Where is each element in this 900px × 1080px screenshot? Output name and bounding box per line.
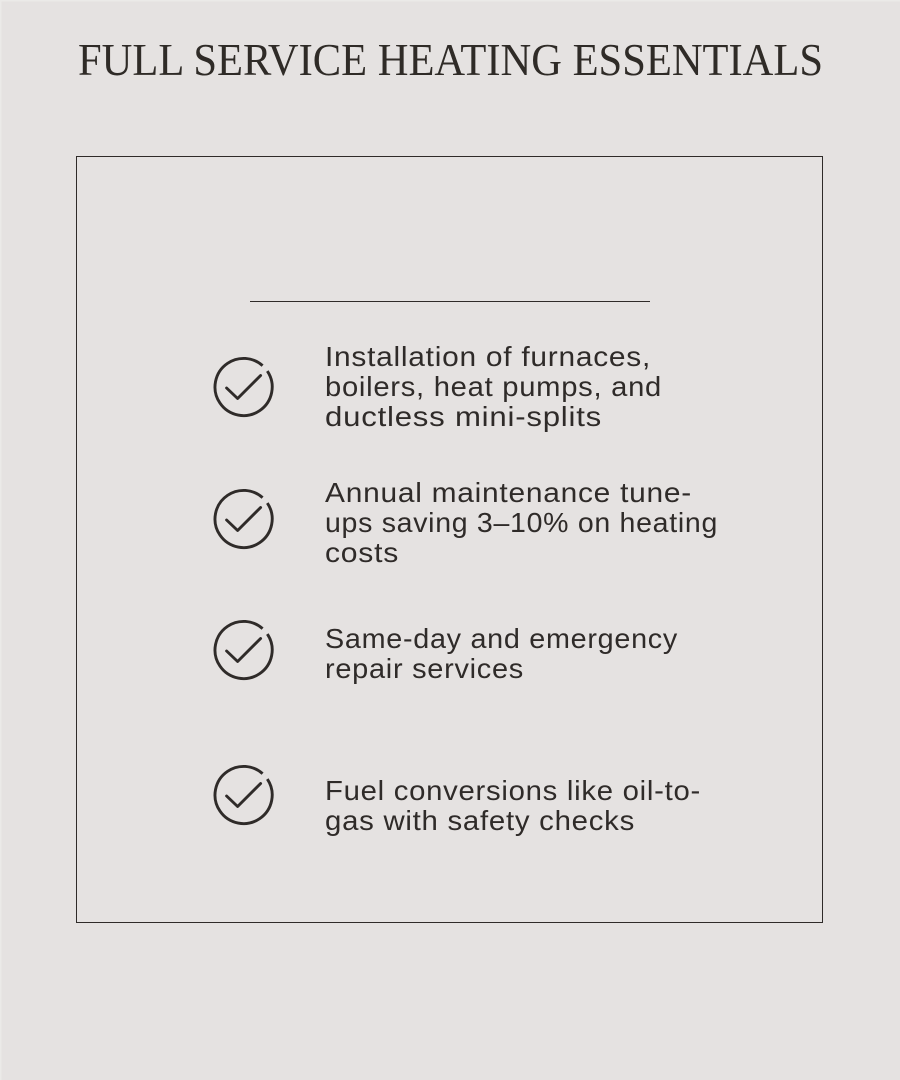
text block: fuel conversions: gas with safety checks [325, 805, 635, 836]
text block: maintenance: ups saving 3–10% on heating [325, 507, 718, 538]
text block: installation [325, 341, 662, 432]
text block: repair [325, 623, 678, 684]
text block: installation: Installation of furnaces, [325, 341, 651, 372]
list item: repair [204, 610, 678, 690]
icon: check mark in circle [204, 347, 283, 427]
text block: fuel conversions [325, 775, 701, 836]
icon: check mark in circle [204, 755, 283, 835]
icon: check mark in circle [204, 479, 283, 559]
title: FULL SERVICE HEATING ESSENTIALS [78, 34, 823, 85]
text block: fuel conversions: Fuel conversions like oil-to- [325, 775, 701, 806]
text block: maintenance: Annual maintenance tune- [325, 477, 692, 508]
list item: maintenance [204, 477, 718, 568]
icon: check mark in circle [204, 610, 283, 690]
list item: fuel conversions [204, 755, 701, 836]
list item: installation [204, 341, 662, 432]
text block: maintenance [325, 477, 718, 568]
text block: installation: boilers, heat pumps, and [325, 371, 662, 402]
panel: outlined frame [76, 156, 822, 922]
text block: installation: ductless mini-splits [325, 401, 602, 432]
text block: repair: Same-day and emergency [325, 623, 678, 654]
text block: repair: repair services [325, 653, 524, 684]
text block: maintenance: costs [325, 537, 399, 568]
